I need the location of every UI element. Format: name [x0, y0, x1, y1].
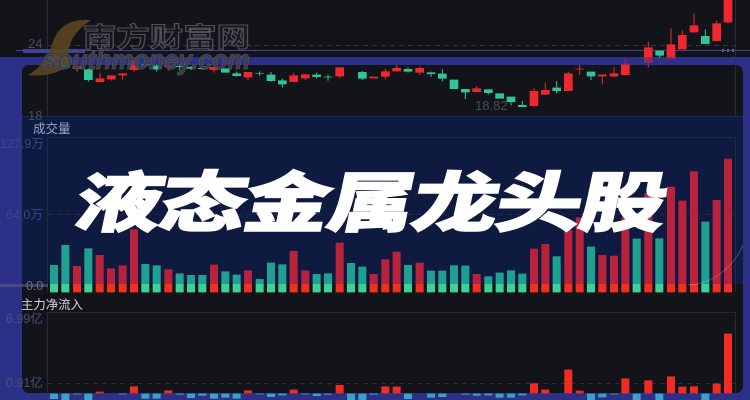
green volume bars	[50, 222, 709, 292]
label 64.0万: 64.0万	[6, 208, 43, 222]
blue band over candles	[0, 57, 750, 65]
red inflow bars	[96, 334, 732, 393]
label 0.91亿: 0.91亿	[6, 375, 43, 390]
navy overlay panel	[22, 117, 743, 284]
volume heading: 成交量	[33, 121, 71, 136]
label 6.99亿: 6.99亿	[6, 311, 43, 326]
net inflow bar chart	[50, 334, 732, 400]
red volume bars	[73, 159, 732, 292]
candlestick chart	[50, 0, 732, 107]
icon: crescent	[28, 20, 91, 75]
label low 18.82: 18.82	[475, 98, 508, 113]
green candles	[50, 29, 710, 107]
volume bar chart	[50, 159, 732, 292]
watermark: southmoney logo	[28, 20, 250, 75]
label 127.9万: 127.9万	[0, 137, 44, 151]
red candles	[73, 0, 732, 107]
volume axis labels	[0, 137, 44, 293]
net inflow axis labels	[6, 311, 43, 390]
label 18: 18	[28, 108, 42, 123]
title: 液态金属龙头股	[68, 152, 678, 245]
label 24: 24	[28, 36, 42, 51]
net inflow heading: 主力净流入	[21, 298, 83, 312]
blue outflow bars	[50, 394, 709, 400]
watermark Chinese name: 南方财富网	[83, 22, 250, 53]
decorative arc	[688, 245, 743, 285]
label 0.0: 0.0	[26, 279, 43, 293]
watermark URL: southmoney.com	[43, 44, 250, 75]
price labels	[28, 36, 508, 123]
